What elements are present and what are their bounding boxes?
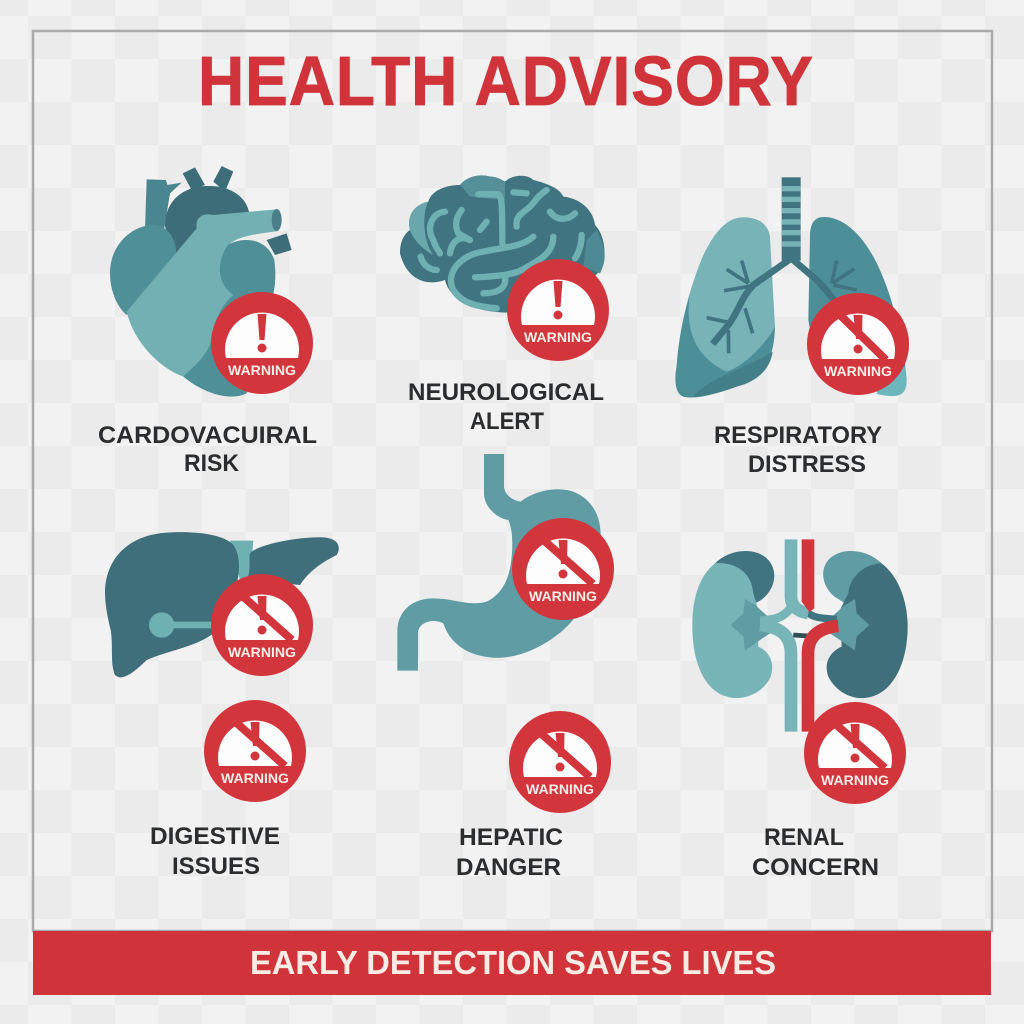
warning badge bbox=[211, 292, 313, 394]
label: HEPATIC bbox=[459, 824, 563, 851]
panel: hepatic bbox=[397, 454, 614, 881]
warning badge: crossed bbox=[512, 518, 614, 620]
icon: liver bbox=[105, 532, 339, 677]
warning badge: crossed bbox=[211, 574, 313, 676]
warning badge: crossed: WARNING bbox=[824, 363, 892, 379]
warning badge bbox=[507, 259, 609, 361]
label: CONCERN bbox=[752, 854, 879, 881]
icon: brain bbox=[400, 175, 605, 313]
warning badge: crossed: WARNING bbox=[821, 772, 889, 788]
icon: kidneys bbox=[692, 539, 908, 732]
warning badge: standalone center: WARNING bbox=[526, 781, 594, 797]
warning badge: crossed: WARNING bbox=[529, 588, 597, 604]
label: ALERT bbox=[470, 408, 544, 435]
panel: renal bbox=[692, 539, 908, 881]
label: DANGER bbox=[456, 854, 561, 881]
footer banner: EARLY DETECTION SAVES LIVES bbox=[250, 944, 776, 981]
icon: lungs bbox=[675, 177, 907, 397]
label: RISK bbox=[184, 450, 240, 477]
warning badge: crossed bbox=[804, 702, 906, 804]
warning badge: standalone left: WARNING bbox=[221, 770, 289, 786]
title: HEALTH ADVISORY bbox=[198, 42, 813, 121]
footer banner bbox=[33, 931, 991, 995]
label: RESPIRATORY bbox=[714, 422, 882, 449]
label bbox=[456, 824, 563, 881]
label bbox=[150, 823, 280, 880]
panel: respiratory bbox=[675, 177, 909, 478]
label bbox=[408, 379, 604, 435]
label: ISSUES bbox=[172, 853, 260, 880]
label: DIGESTIVE bbox=[150, 823, 280, 850]
warning badge: standalone center bbox=[509, 711, 611, 813]
warning badge: WARNING bbox=[524, 329, 592, 345]
label: DISTRESS bbox=[748, 451, 866, 478]
panel: cardiovascular bbox=[98, 166, 317, 477]
warning badge: WARNING bbox=[228, 362, 296, 378]
icon: heart bbox=[110, 166, 292, 397]
label: CARDOVACUIRAL bbox=[98, 422, 317, 449]
label bbox=[98, 422, 317, 477]
panel: digestive bbox=[105, 532, 339, 880]
panel: neurological bbox=[400, 175, 609, 435]
label: RENAL bbox=[764, 824, 844, 851]
label bbox=[752, 824, 879, 881]
warning badge: crossed bbox=[807, 293, 909, 395]
label bbox=[714, 422, 882, 478]
label: NEUROLOGICAL bbox=[408, 379, 604, 406]
icon: stomach bbox=[397, 454, 601, 671]
warning badge: crossed: WARNING bbox=[228, 644, 296, 660]
warning badge: standalone left bbox=[204, 700, 306, 802]
